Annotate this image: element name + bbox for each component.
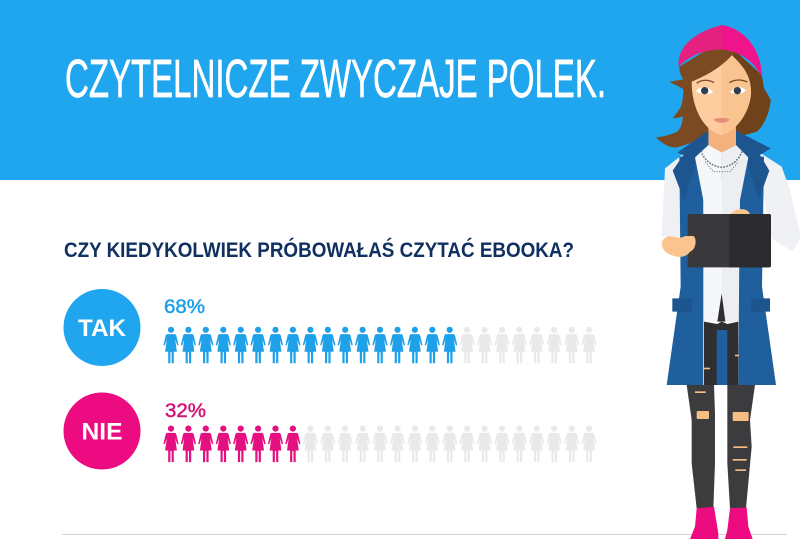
hair — [656, 40, 771, 147]
fringe — [683, 47, 735, 81]
illustration: woman with tablet — [656, 25, 800, 539]
face — [692, 55, 751, 135]
gripping hand — [662, 236, 696, 257]
pictogram row: 68% yes — [163, 327, 597, 363]
tablet — [688, 214, 771, 267]
blue coat — [667, 157, 703, 385]
badge: TAK: TAK — [78, 315, 127, 342]
coat collar — [673, 131, 708, 200]
header band — [0, 0, 800, 180]
badge: NIE: NIE — [82, 418, 122, 446]
percentage: 32%: 32% — [165, 400, 206, 422]
pictogram row: 32% no — [163, 426, 597, 462]
coat pockets — [672, 298, 692, 312]
white jacket sleeves — [662, 153, 690, 237]
neck — [708, 120, 736, 157]
percentage: 68%: 68% — [164, 296, 205, 318]
shirt — [695, 145, 722, 322]
question heading: CZY KIEDYKOLWIEK PRÓBOWAŁAŚ CZYTAĆ EBOOKA? — [64, 237, 574, 262]
hat — [678, 25, 762, 77]
boots — [690, 507, 718, 539]
legs — [687, 385, 715, 508]
tights rips — [695, 355, 749, 471]
dark leggings under shirt — [704, 322, 738, 385]
necklace — [701, 151, 742, 167]
eyes and mouth — [696, 80, 747, 123]
badge: TAK — [64, 289, 140, 366]
tablet hand — [731, 209, 750, 214]
badge: NIE — [64, 392, 140, 470]
